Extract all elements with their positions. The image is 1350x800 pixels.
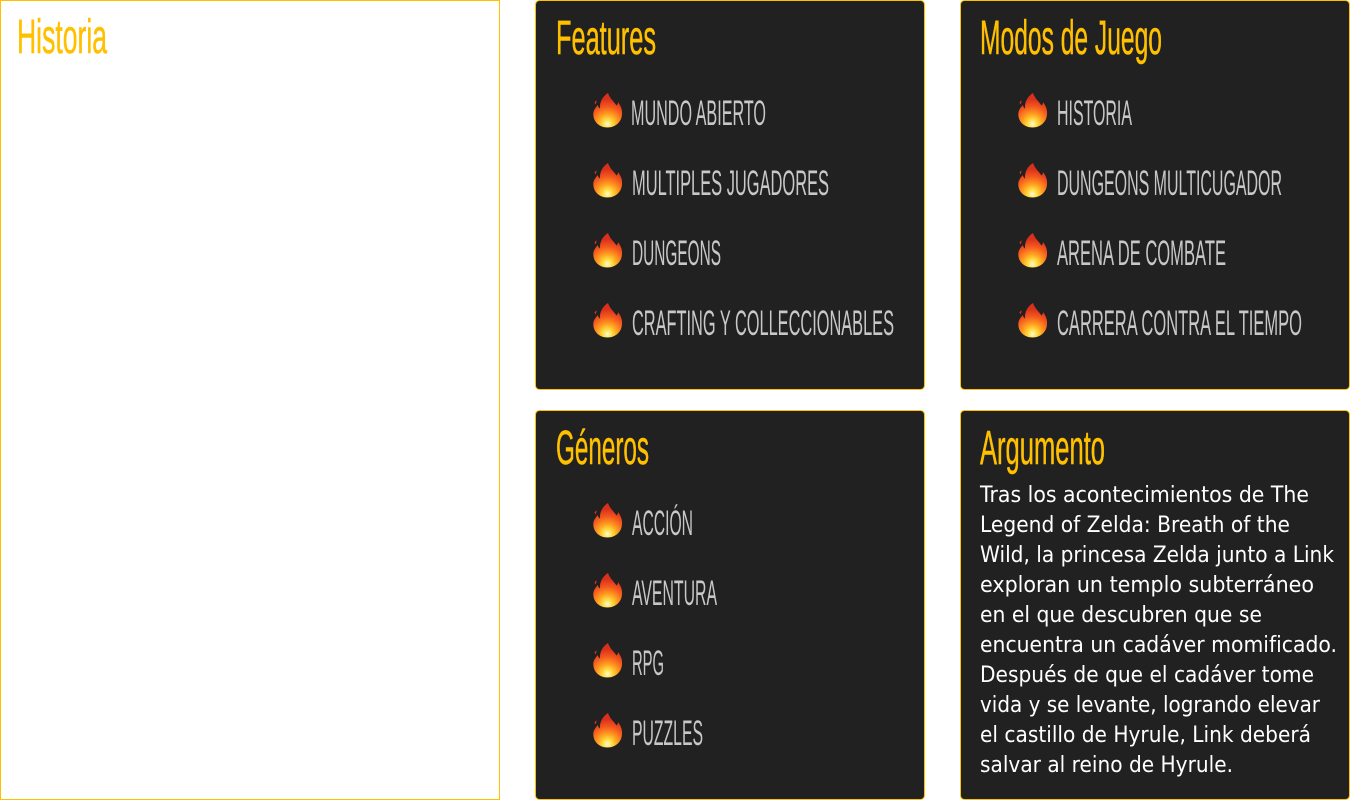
text block: plot summary: en el que descubren que se [980,603,1262,628]
list item: Aventura [593,573,717,613]
panel: Features: CRAFTING Y COLLECCIONABLES [632,304,894,343]
list item: RPG [593,643,664,683]
text block: plot summary: salvar al reino de Hyrule. [980,753,1233,778]
panel: Modos de Juego: HISTORIA [1057,94,1132,133]
panel: Modos de Juego [960,0,1350,390]
heading: Historia: Historia [17,11,107,64]
text block: plot summary: el castillo de Hyrule, Link deberá [980,723,1311,748]
list item: Multiples jugadores [593,163,829,203]
list item: Dungeons multicugador [1018,163,1282,203]
text block: plot summary: Tras los acontecimientos de The [979,483,1309,508]
text block: plot summary [979,483,1337,778]
heading: Argumento: Argumento [980,422,1105,475]
heading: Géneros: Géneros [556,422,649,475]
text block: plot summary: Legend of Zelda: Breath of the [980,513,1290,538]
list item: Puzzles [593,713,703,753]
panel: Features: DUNGEONS [632,234,721,273]
list item: Dungeons [593,233,721,273]
list item: Crafting y collecionables [593,303,894,343]
panel: Géneros: PUZZLES [632,714,703,753]
panel: Géneros [536,410,924,800]
text block: plot summary: vida y se levante, logrando elevar [980,693,1321,718]
text block: plot summary: Después de que el cadáver tome [980,663,1314,688]
text block: plot summary: exploran un templo subterráneo [980,573,1314,598]
panel: Géneros: AVENTURA [632,574,717,613]
panel: Features: MUNDO ABIERTO [631,94,766,133]
panel: Géneros: ACCIÓN [632,504,693,543]
heading: Features: Features [556,12,656,65]
list item: Mundo abierto [593,93,766,133]
list item: Historia [1018,93,1132,133]
panel: Géneros: RPG [632,644,664,683]
panel: Features: MULTIPLES JUGADORES [632,164,829,203]
panel: Features [536,0,924,390]
list item: Acción [593,503,693,543]
panel: Argumento [960,410,1350,800]
list item: Arena de combate [1018,233,1226,273]
heading: Modos de Juego: Modos de Juego [980,12,1162,65]
